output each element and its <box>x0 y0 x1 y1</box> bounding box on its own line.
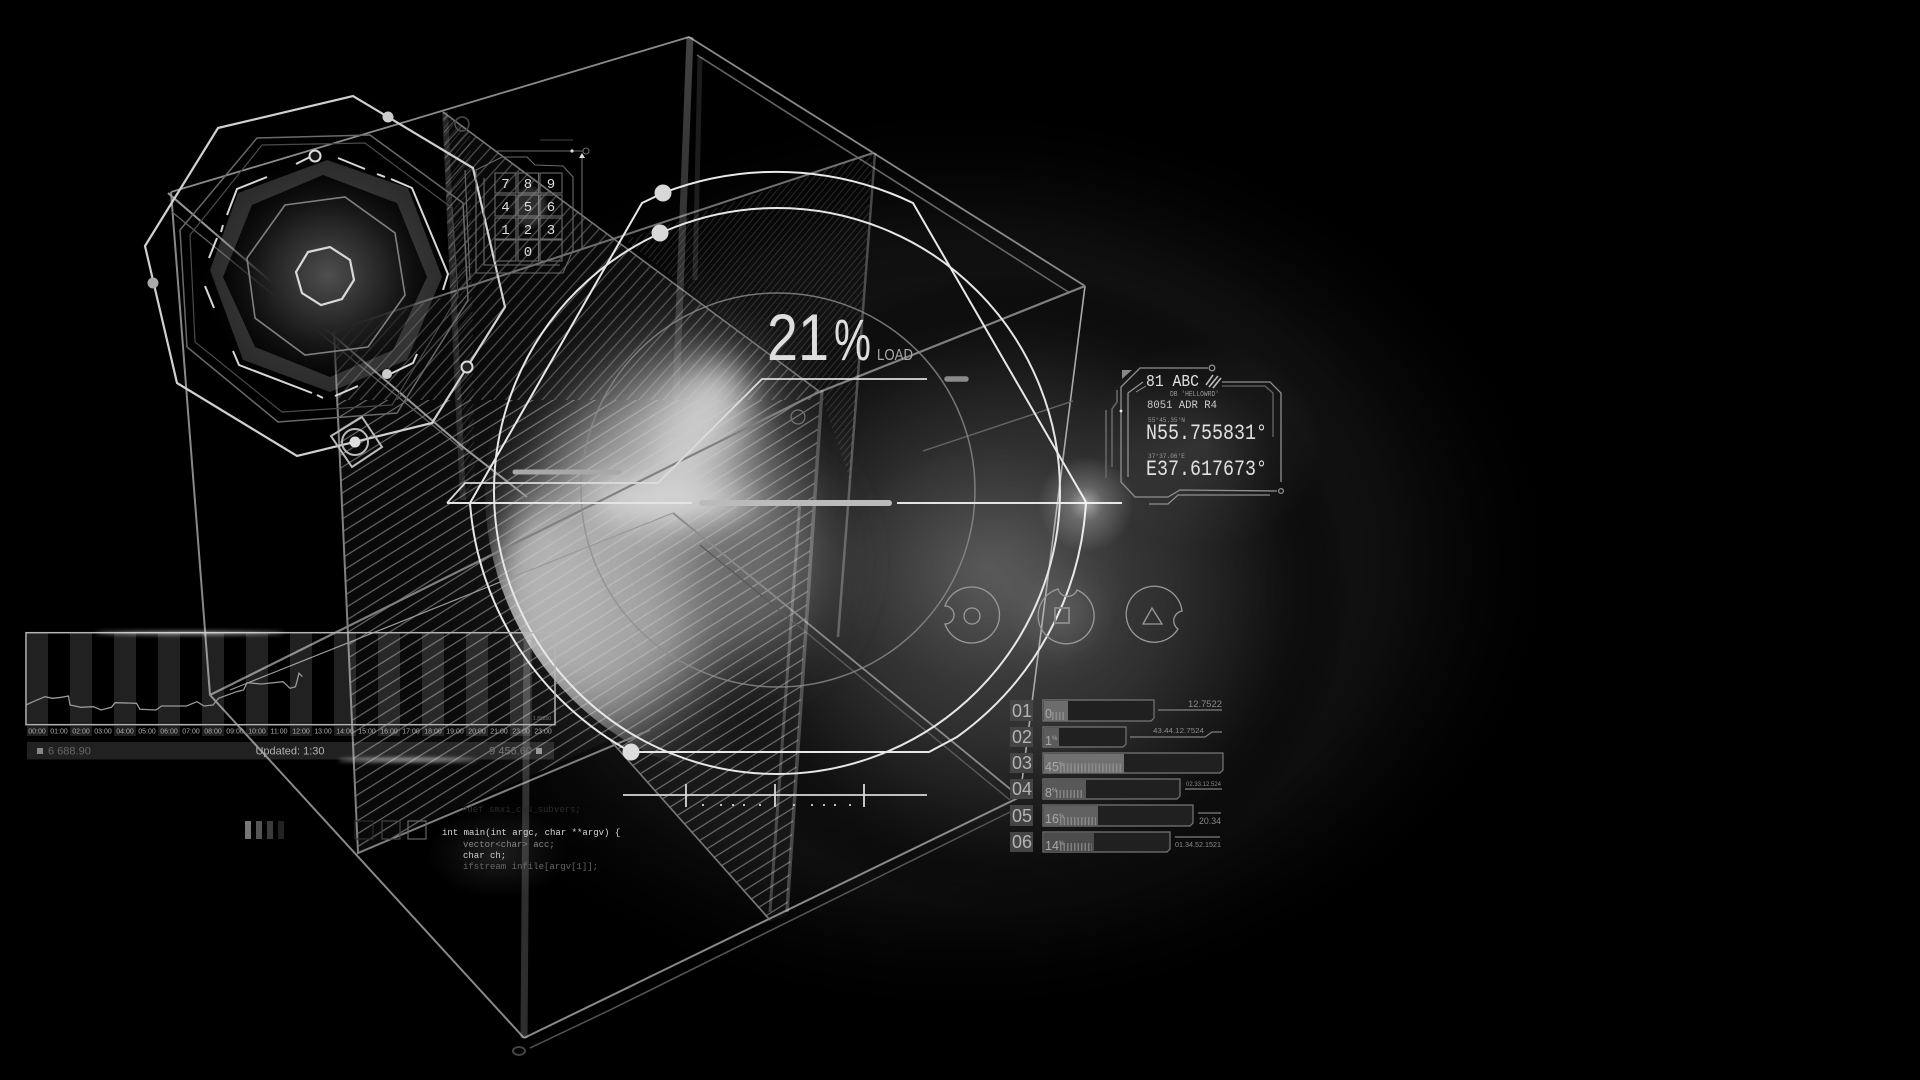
bar values: % <box>1052 788 1058 794</box>
wireframe cube <box>168 37 1085 1055</box>
load readout: 21 <box>767 300 829 374</box>
chart hour labels: 09:00 <box>226 728 244 736</box>
row labels: 05 <box>1012 806 1032 826</box>
bar side readouts: 02.33.12.524 <box>1186 782 1222 788</box>
chart hour labels: 19:00 <box>446 728 464 736</box>
bar fills <box>1044 701 1124 852</box>
chart hour labels: 12:00 <box>292 728 310 736</box>
coordinates panel: 8051 ADR R4 <box>1147 400 1217 412</box>
chart status bar: 9 456.60 <box>489 746 532 758</box>
bar tracks <box>1043 700 1223 852</box>
keypad <box>465 140 589 280</box>
chart hour labels: 21:00 <box>490 728 508 736</box>
bar values: 0 <box>1045 707 1052 721</box>
background glow <box>340 90 1580 1030</box>
octagon radar <box>145 96 505 467</box>
bar side readouts: 43.44.12.7524 <box>1153 726 1204 735</box>
keypad: 2 <box>524 223 532 239</box>
chart hour labels: 01:00 <box>50 728 68 736</box>
row labels: 02 <box>1012 727 1032 747</box>
load readout: % <box>834 308 871 373</box>
chart hour labels: 10:00 <box>248 728 266 736</box>
chart hour labels: 23:00 <box>534 728 552 736</box>
load bars list <box>1010 699 1223 853</box>
chart status bar: 6 688.90 <box>48 746 91 758</box>
chart status bar <box>27 742 554 760</box>
tick scale <box>623 784 927 807</box>
keypad: 8 <box>524 177 532 193</box>
chart hour labels: 20:00 <box>468 728 486 736</box>
code snippet: #def smxi_cpu_subvers; <box>462 805 581 815</box>
chart hour labels: 06:00 <box>160 728 178 736</box>
radar circles <box>447 172 1122 774</box>
coordinates panel: 55°45.35'N <box>1148 416 1185 424</box>
code snippet: ifstream infile[argv[1]]; <box>463 862 598 872</box>
keypad: 0 <box>524 245 532 261</box>
bar side readouts: 12.7522 <box>1188 699 1222 710</box>
lens flare <box>1038 456 1134 552</box>
code snippet: char ch; <box>463 851 506 861</box>
chart hour labels: 03:00 <box>94 728 112 736</box>
coordinates panel: N55.755831° <box>1146 421 1267 446</box>
bar values: % <box>1059 762 1065 768</box>
row labels: 06 <box>1012 832 1032 852</box>
hatched planes <box>330 100 873 930</box>
chart hour labels: 00:00 <box>28 728 46 736</box>
chart light streaks <box>95 632 478 762</box>
load readout <box>767 300 913 374</box>
bar values: % <box>1052 736 1058 742</box>
bar values: 14 <box>1045 839 1059 853</box>
load readout: LOAD <box>877 347 913 364</box>
coordinates panel: DB 'HELLOWRD' <box>1170 391 1219 399</box>
row labels: 03 <box>1012 753 1032 773</box>
code snippet: vector<char> acc; <box>463 840 555 850</box>
row labels <box>1010 700 1033 852</box>
round status icons <box>945 584 1182 648</box>
bar side readouts: 20.34 <box>1199 816 1221 827</box>
bar values: 16 <box>1045 812 1059 826</box>
chart hour labels: 07:00 <box>182 728 200 736</box>
keypad: 9 <box>547 177 555 193</box>
bar values: 8 <box>1045 786 1052 800</box>
chart hour labels <box>27 726 552 736</box>
bar values: % <box>1059 814 1065 820</box>
chart hour labels: 15:00 <box>358 728 376 736</box>
coordinates panel: E37.617673° <box>1146 457 1267 482</box>
chart status bar: Updated: 1:30 <box>255 746 325 758</box>
HUD scene <box>25 36 1439 1056</box>
chart frame <box>26 633 555 725</box>
keypad: 4 <box>501 200 510 216</box>
keypad: 3 <box>547 223 555 239</box>
coordinates panel: 81 ABC <box>1146 373 1199 392</box>
code snippet: int main(int argc, char **argv) { <box>442 828 620 838</box>
chart line <box>26 673 302 710</box>
chart hour labels: 05:00 <box>138 728 156 736</box>
bar values: 45 <box>1045 760 1059 774</box>
coordinates panel <box>1106 365 1283 504</box>
keypad: 5 <box>524 200 532 216</box>
keypad: 1 <box>501 223 510 239</box>
chart hour labels: 14:00 <box>336 728 354 736</box>
code snippet <box>442 805 620 872</box>
bar side readouts <box>1130 699 1222 849</box>
chart hour labels: 23:00 <box>512 728 530 736</box>
chart hour labels: 08:00 <box>204 728 222 736</box>
chart stripes <box>27 633 532 725</box>
keypad: 7 <box>501 177 510 193</box>
chart hour labels: 04:00 <box>116 728 134 736</box>
row labels: 04 <box>1012 779 1032 799</box>
bar values <box>1045 707 1065 853</box>
row labels: 01 <box>1012 701 1032 721</box>
chart hour labels: 13:00 <box>314 728 332 736</box>
bar side readouts: 01.34.52.1521 <box>1175 840 1221 849</box>
chart hour labels: 17:00 <box>402 728 420 736</box>
level ticks <box>245 821 426 839</box>
chart hour labels: 16:00 <box>380 728 398 736</box>
coordinates panel: 37°37.06'E <box>1148 452 1185 460</box>
bar values: % <box>1059 841 1065 847</box>
timeline chart: 1.88850 <box>533 716 551 722</box>
chart hour labels: 18:00 <box>424 728 442 736</box>
chart hour labels: 02:00 <box>72 728 90 736</box>
timeline chart <box>26 632 555 762</box>
central light glow <box>447 316 823 784</box>
bar values: 1 <box>1045 734 1052 748</box>
keypad: 6 <box>547 200 555 216</box>
chart hour labels: 11:00 <box>270 728 288 736</box>
